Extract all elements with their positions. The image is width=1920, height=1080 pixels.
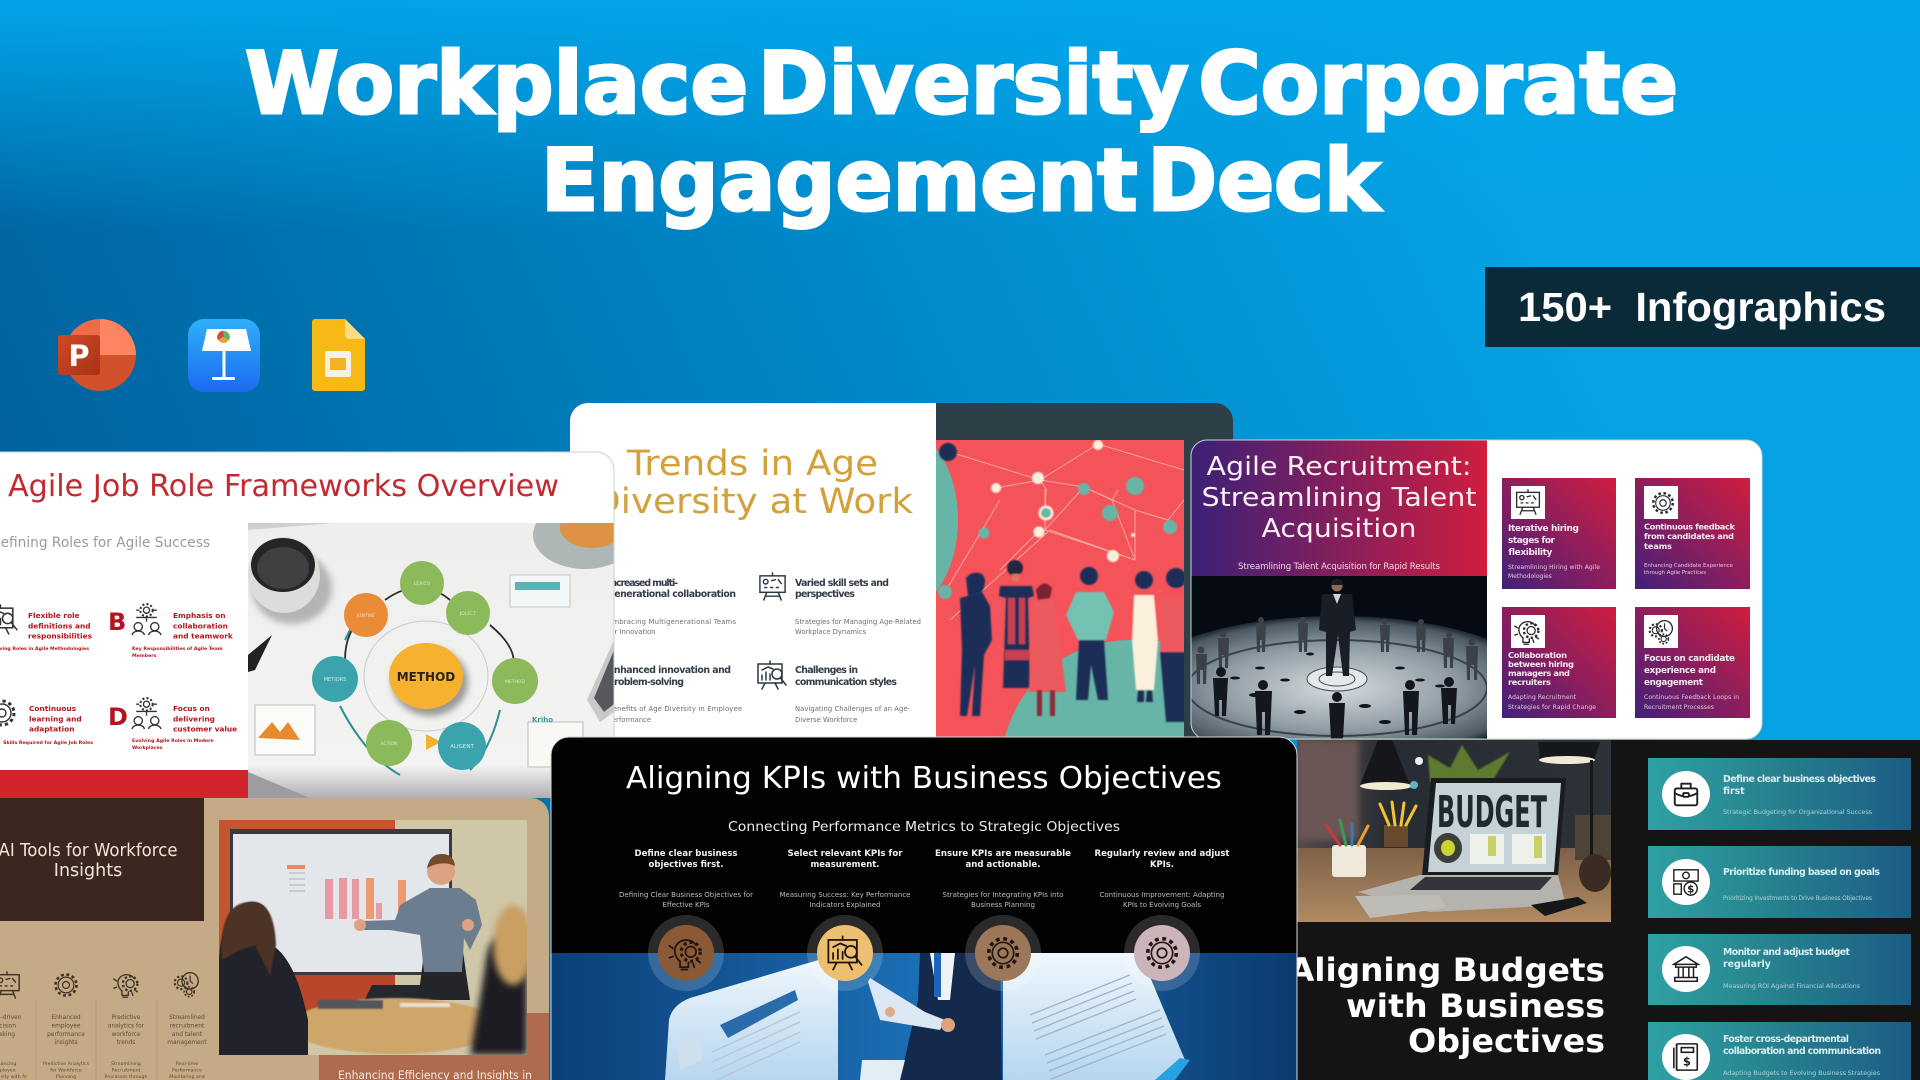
heading: Aligning Budgets: Aligning Budgets (1289, 951, 1605, 989)
column: review KPIs: KPIs to Evolving Goals (1123, 901, 1201, 909)
card: continuous feedback: from candidates and (1644, 531, 1734, 541)
card: collaboration: Strategies for Rapid Change (1508, 704, 1596, 711)
card: monitor and adjust: Monitor and adjust budget (1723, 947, 1851, 958)
column: review KPIs: KPIs. (1150, 860, 1174, 870)
card: continuous feedback: teams (1644, 541, 1672, 551)
text block: role captions: Key Responsibilities of Agile Team (132, 646, 223, 652)
photo: method diagram: METHOD (397, 670, 455, 684)
text block: trend captions: Performance (608, 716, 651, 724)
card: collaboration: recruiters (1508, 677, 1551, 687)
icon: PowerPoint (58, 319, 136, 391)
card: continuous feedback: Enhancing Candidate Experience (1644, 563, 1734, 569)
text block: AI columns: performance (47, 1032, 85, 1038)
letters B and D: B (108, 608, 126, 636)
red strip (0, 770, 248, 798)
panel: Aligning Budgets (1289, 740, 1920, 1080)
text block: role items: Flexible role (28, 611, 80, 620)
card: collaboration: Collaboration (1508, 650, 1567, 660)
card: continuous feedback: through Agile Practices (1644, 570, 1706, 576)
heading: Agile Recruitment (1202, 452, 1476, 544)
subtitle: connecting metrics: Connecting Performance Metrics to Strategic Objectives (728, 819, 1120, 835)
photo: method diagram: LEXICO (414, 581, 431, 587)
title: Workplace Diversity Corporate (245, 34, 1678, 134)
text block: role items: Emphasis on (173, 611, 226, 620)
illustration: people and network (936, 440, 1184, 736)
text block: AI columns: management (167, 1040, 207, 1046)
text block: role items: Continuous (29, 704, 77, 713)
people silhouettes (966, 573, 985, 596)
card: iterative hiring: stages for (1508, 536, 1556, 546)
text block: AI columns: insights (55, 1040, 77, 1046)
text block: AI captions: Planning (56, 1074, 76, 1080)
photo: method diagram: JOLECT (459, 611, 476, 617)
text block: AI columns: Enhanced (51, 1015, 81, 1021)
text block: trend points: Challenges in (795, 665, 858, 676)
text block: trend points: Varied skill sets and (795, 578, 889, 589)
text block: role items (28, 611, 237, 734)
text block: AI columns: employee (51, 1024, 81, 1030)
icon: AI board (0, 972, 19, 998)
column: define objectives (619, 849, 753, 991)
badge: 150+ Infographics: 150+ Infographics (1518, 284, 1886, 330)
title (245, 34, 1678, 231)
text block: role captions: Evolving Agile Roles in Modern (132, 738, 214, 744)
heading: Aligning KPIs: Aligning KPIs with Business Objectives (626, 761, 1222, 796)
letters B and D: D (108, 703, 128, 731)
card: candidate experience: engagement (1644, 678, 1703, 688)
heading: Trends in Age: Diversity at Work (592, 482, 914, 522)
heading: Agile Job Role Frameworks Overview: Agile Job Role Frameworks Overview (8, 469, 559, 504)
card: prioritize funding: Prioritize funding based on goals (1723, 867, 1880, 878)
photo: man on platform (1192, 576, 1487, 738)
heading box: AI Tools: AI Tools for Workforce (0, 841, 178, 861)
card: define clear business objectives: first (1723, 786, 1745, 797)
card: iterative hiring: Iterative hiring (1508, 524, 1579, 534)
text block: AI columns: Predictive (111, 1015, 141, 1021)
icon: PowerPoint: P (68, 339, 90, 373)
card: collaboration: between hiring (1508, 659, 1574, 669)
heading: Aligning Budgets: Objectives (1408, 1022, 1605, 1060)
icon: role search (0, 605, 17, 634)
text block: trend captions (608, 618, 921, 724)
text block: AI columns: workforce (111, 1032, 141, 1038)
photo: budget laptop: BUDGET (1437, 787, 1547, 838)
text block: trend points: generational collaboration (608, 589, 736, 600)
text block: trend captions: Navigating Challenges of an Age- (795, 705, 911, 713)
text block: AI columns: trends (117, 1040, 135, 1046)
card: candidate experience: experience and (1644, 666, 1716, 676)
badge: 150+ Infographics (1485, 267, 1920, 347)
illustration: documents and businessman (665, 953, 1190, 1080)
card: iterative hiring: flexibility (1508, 548, 1553, 558)
text block: trend points: Enhanced innovation and (608, 665, 731, 676)
text block: trend points: perspectives (795, 589, 855, 600)
icon: customer value (132, 698, 161, 729)
text block: trend captions: Embracing Multigenerational Teams (608, 618, 736, 626)
subtitle: Streamlining Talent Acquisition for Rapid Results (1238, 562, 1441, 572)
letters B and D (110, 612, 127, 725)
column: select KPIs: Select relevant KPIs for (788, 849, 903, 859)
heading: Aligning Budgets (1289, 951, 1605, 1060)
icon: teamwork (132, 604, 161, 635)
text block: trend captions: Strategies for Managing Age-Related (795, 618, 921, 626)
card: foster collaboration (1648, 1022, 1911, 1080)
photo: budget laptop (1297, 740, 1611, 922)
photo: method diagram: ACTION (380, 741, 398, 747)
text block: AI captions (0, 1061, 205, 1080)
text block: AI captions: Real-time (176, 1061, 198, 1067)
text block: AI captions: Streamlining (111, 1061, 141, 1067)
icon: Keynote (188, 319, 260, 392)
card: define clear business objectives: Strategic Budgeting for Organizational Success (1723, 808, 1873, 816)
icon: strategy board (760, 573, 785, 600)
card: monitor and adjust (1648, 934, 1911, 1005)
icon: AI clock gears (175, 973, 198, 997)
panel: Trends in Age Diversity (570, 403, 1236, 743)
card: foster collaboration: collaboration and communication (1723, 1046, 1881, 1057)
panel: Agile Recruitment (1192, 440, 1762, 738)
text block: role items: responsibilities (28, 632, 93, 640)
card: monitor and adjust: regularly (1723, 959, 1771, 970)
column: measurable KPIs: Ensure KPIs are measurable (935, 849, 1071, 859)
text block: role captions (0, 646, 223, 751)
photo: method diagram: Kriho (532, 716, 553, 724)
text block: trend captions: Diverse Workforce (795, 716, 857, 724)
column: review KPIs: Continuous Improvement: Adapting (1100, 891, 1224, 899)
text block: AI captions: Performance (172, 1068, 202, 1074)
heading box: AI Tools (0, 798, 204, 921)
icon: Google Slides (312, 319, 365, 391)
column: define objectives: Define clear business (634, 849, 738, 859)
photo: method diagram: METHOD (505, 679, 525, 685)
text block: role items: and teamwork (173, 632, 234, 640)
text block: trend captions: Benefits of Age Diversity in Employee (608, 705, 742, 713)
card: define clear business objectives: Define clear business objectives (1723, 774, 1876, 785)
card: collaboration: managers and (1508, 668, 1570, 678)
text block: AI columns: recruitment (170, 1024, 205, 1030)
icon: learning gear (0, 701, 14, 725)
text block: AI captions: for Workforce (50, 1068, 82, 1074)
column: measurable KPIs: Business Planning (971, 901, 1035, 909)
column: measurable KPIs (935, 849, 1071, 991)
text block: AI columns: and talent (172, 1032, 203, 1038)
column: define objectives: Effective KPIs (662, 901, 710, 909)
card: candidate experience: Recruitment Processes (1644, 704, 1714, 711)
heading: Trends in Age: Trends in Age (626, 444, 878, 484)
heading: Trends in Age (614, 448, 913, 520)
text block: trend points: communication styles (795, 677, 897, 688)
column: review KPIs: Regularly review and adjust (1094, 849, 1230, 859)
text block: role captions: Members (132, 653, 157, 659)
icon: AI gears (56, 974, 76, 996)
column: select KPIs: Indicators Explained (810, 901, 880, 909)
card: iterative hiring: Methodologies (1508, 573, 1552, 580)
card: continuous feedback: Continuous feedback (1644, 522, 1735, 532)
text block: role items: collaboration (173, 622, 228, 630)
panel: Agile Job Role Frameworks (0, 452, 637, 798)
text block: AI captions: Recruitment (112, 1068, 141, 1074)
card: collaboration: Adapting Recruitment (1508, 694, 1577, 701)
text block: role items: customer value (173, 724, 237, 734)
photo: presenter at screen (219, 820, 533, 1055)
text block: role captions: Workplaces (132, 745, 163, 751)
text block: role items: learning and (29, 714, 82, 724)
icon: AI bulb (114, 975, 137, 997)
text block: role items: delivering (173, 714, 215, 724)
photo: method diagram: JUNTINE (356, 613, 375, 619)
icon: chart board (758, 661, 786, 689)
heading: Agile Recruitment: Streamlining Talent (1202, 483, 1476, 513)
card: candidate experience (1635, 607, 1750, 718)
heading: Agile Recruitment: Agile Recruitment: (1206, 452, 1472, 482)
text block: trend points: problem-solving (608, 677, 684, 688)
card: iterative hiring (1502, 478, 1616, 589)
text block: role items: definitions and (28, 622, 90, 630)
heading: Agile Recruitment: Acquisition (1262, 514, 1416, 544)
column: define objectives: Defining Clear Business Objectives for (619, 891, 753, 899)
text block: trend captions: for Innovation (608, 628, 656, 636)
card: foster collaboration: Foster cross-departmental (1723, 1034, 1849, 1045)
column: review KPIs (1094, 849, 1230, 991)
text block: role items: adaptation (29, 724, 74, 734)
card: collaboration (1502, 607, 1616, 718)
photo: method diagram: METIORS (324, 677, 346, 683)
panel: AI Tools for Workforce Insights (0, 798, 560, 1080)
text block: trend points: Increased multi- (608, 578, 678, 589)
card: prioritize funding: Prioritizing Investments to Drive Business Objectives (1723, 895, 1872, 902)
column: measurable KPIs: and actionable. (966, 860, 1040, 870)
text block: AI captions: Processes through (104, 1074, 148, 1080)
text block: AI columns (0, 1015, 207, 1046)
card: define clear business objectives (1648, 758, 1911, 830)
text block: trend points (608, 578, 897, 688)
text block: role captions: Skills Required for Agile Job Roles (3, 740, 93, 746)
text block: AI captions: Monitoring and (169, 1074, 205, 1080)
photo: method diagram (248, 523, 614, 798)
text block: role items: Focus on (173, 704, 210, 713)
card: candidate experience: Continuous Feedback Loops in (1644, 694, 1739, 701)
column: select KPIs: Measuring Success: Key Performance (780, 891, 910, 899)
column: define objectives: objectives first. (648, 860, 724, 870)
card: continuous feedback (1635, 478, 1750, 589)
card: foster collaboration: Adapting Budgets to Evolving Business Strategies (1723, 1069, 1881, 1077)
card: iterative hiring: Streamlining Hiring with Agile (1508, 564, 1600, 571)
card: candidate experience: Focus on candidate (1644, 654, 1735, 664)
heading: Aligning Budgets: with Business (1346, 987, 1605, 1025)
column: select KPIs (780, 849, 910, 991)
photo: method diagram: ALIGENT (450, 744, 474, 750)
text block: trend captions: Workplace Dynamics (795, 628, 867, 636)
text block: AI columns: analytics for (108, 1024, 145, 1030)
card: monitor and adjust: Measuring ROI Against Financial Allocations (1723, 982, 1861, 990)
panel: Aligning KPIs (551, 737, 1297, 1080)
heading box: AI Tools: Insights (54, 861, 122, 881)
column: measurable KPIs: Strategies for Integrating KPIs into (942, 891, 1064, 899)
card: prioritize funding (1648, 846, 1911, 918)
title: Engagement Deck (541, 131, 1382, 231)
text block: AI captions: Predictive Analytics (43, 1061, 89, 1067)
text block: AI columns: Streamlined (169, 1015, 205, 1021)
column: select KPIs: measurement. (810, 860, 880, 870)
